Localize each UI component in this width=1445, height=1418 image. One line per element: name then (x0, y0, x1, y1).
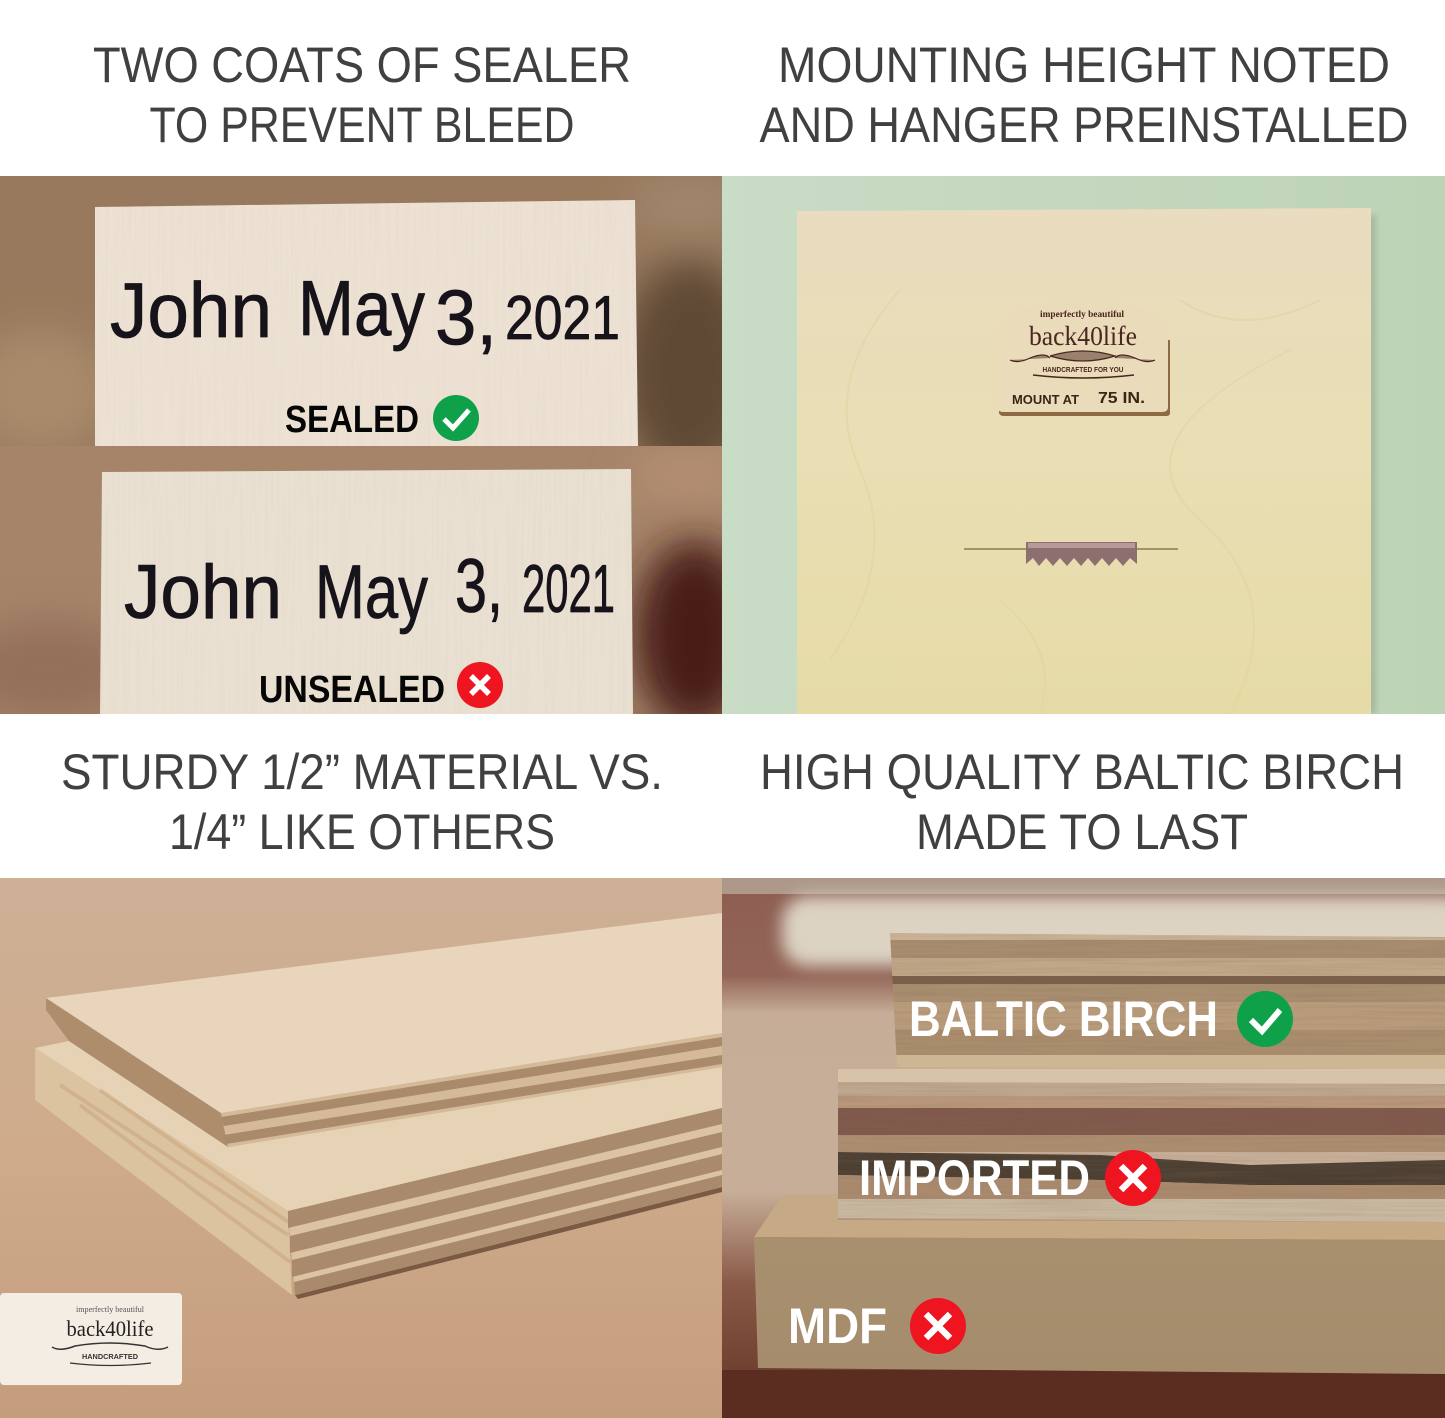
logo badge: back40life (66, 1316, 154, 1341)
heading: two coats of sealer: TO PREVENT BLEED (150, 97, 574, 153)
board: imported (835, 1069, 1445, 1224)
logo badge: imperfectly beautiful (76, 1305, 145, 1314)
handwriting: sealed: John (110, 266, 272, 354)
label: mdf: MDF (788, 1298, 887, 1354)
heading: mounting height: MOUNTING HEIGHT NOTED (778, 37, 1390, 93)
panel: unsealed photo (0, 446, 755, 730)
label tag: HANDCRAFTED FOR YOU (1042, 367, 1124, 374)
heading: sturdy material: 1/4” LIKE OTHERS (169, 804, 555, 860)
label: unsealed: UNSEALED (259, 669, 445, 711)
handwriting: unsealed: 3, (455, 544, 503, 629)
heading: baltic birch: MADE TO LAST (916, 804, 1248, 860)
handwriting: sealed: 3, (435, 273, 497, 361)
heading: two coats of sealer: TWO COATS OF SEALER (93, 37, 631, 93)
sealed board (95, 200, 638, 446)
wood grain (842, 290, 1320, 642)
logo badge (0, 1293, 182, 1385)
handwriting: sealed: 2021 (505, 284, 620, 353)
label tag: 75 IN. (1098, 390, 1145, 407)
board: baltic birch (885, 930, 1445, 1070)
label tag: back40life (1029, 321, 1137, 351)
icon: red x (1105, 1150, 1161, 1206)
label: baltic birch: BALTIC BIRCH (909, 991, 1218, 1047)
panel: plywood thickness photo (0, 878, 722, 1418)
handwriting: unsealed: John (124, 550, 282, 635)
plywood board (797, 208, 1371, 714)
heading: mounting height (760, 37, 1408, 153)
board: mdf (754, 1196, 1445, 1374)
label tag (998, 300, 1170, 416)
thick board (35, 1041, 722, 1299)
handwriting: sealed: May (298, 264, 425, 352)
panel: mounting photo (722, 176, 1445, 714)
handwriting: unsealed (124, 558, 614, 634)
label: sealed: SEALED (285, 399, 419, 441)
icon: green check (433, 395, 479, 441)
label: imported: IMPORTED (859, 1150, 1090, 1206)
panel: sealed photo (0, 176, 722, 446)
heading: baltic birch (760, 744, 1404, 860)
sawtooth hanger (964, 542, 1178, 566)
label tag: MOUNT AT (1012, 392, 1079, 407)
handwriting: unsealed: May (315, 550, 428, 635)
panel: material comparison photo (722, 878, 1445, 1418)
icon: red x (457, 662, 503, 708)
unsealed board (100, 469, 633, 714)
handwriting: sealed (110, 280, 618, 354)
heading: two coats of sealer (93, 37, 631, 153)
heading: sturdy material (61, 744, 663, 860)
icon: red x (910, 1298, 966, 1354)
thin board (46, 913, 722, 1147)
handwriting: unsealed: 2021 (522, 551, 615, 627)
icon: green check (1237, 991, 1293, 1047)
label tag: imperfectly beautiful (1040, 310, 1124, 320)
logo badge: HANDCRAFTED (82, 1352, 139, 1361)
heading: sturdy material: STURDY 1/2” MATERIAL VS. (61, 744, 663, 800)
